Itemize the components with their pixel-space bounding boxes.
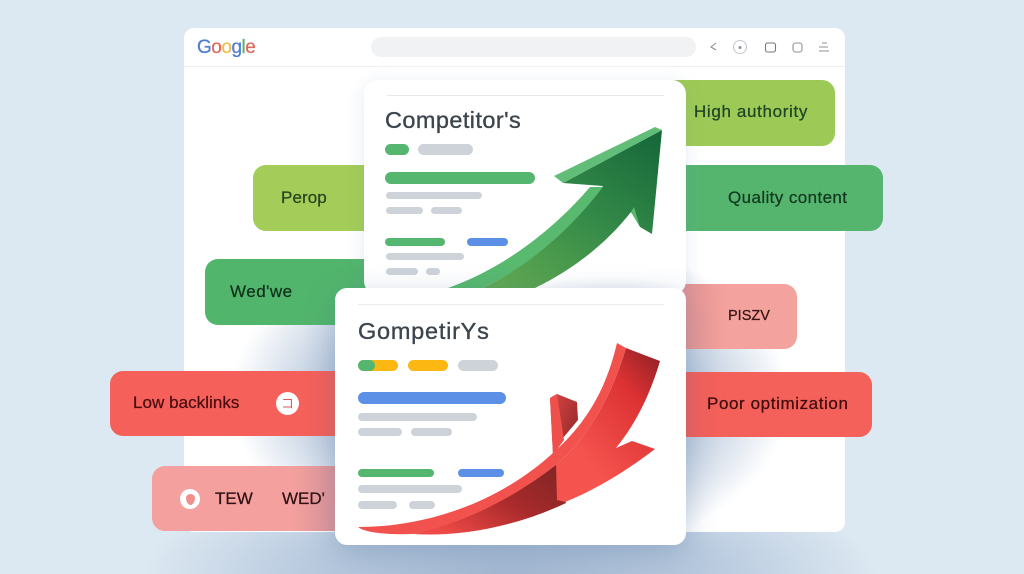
header divider [184, 66, 845, 67]
pill: high authority: High authority [694, 102, 808, 121]
card: top competitor [364, 80, 686, 295]
dark lower tail [413, 463, 566, 535]
pill: piszv: PISZV [728, 308, 770, 324]
gray short line [386, 207, 423, 214]
gray tag [418, 144, 473, 155]
green bar [358, 469, 434, 477]
browser content shading [224, 228, 845, 532]
google logo: Google [197, 37, 255, 58]
icon: low backlinks badge [276, 392, 299, 415]
tag row [385, 144, 473, 155]
pill: wed'we [205, 259, 385, 325]
pill: tew wed [152, 466, 352, 531]
search bar [371, 37, 696, 57]
pill: low backlinks [110, 371, 350, 436]
blue bar [467, 238, 508, 246]
yellow tag with green start [358, 360, 398, 371]
card top line [387, 95, 664, 96]
gray short line two [411, 428, 452, 436]
gray short line two [431, 207, 462, 214]
pill: piszv [670, 284, 797, 349]
heading: competitor's: Competitor's [385, 107, 521, 133]
shaft and head [556, 348, 660, 502]
first result lines [358, 392, 506, 436]
head highlight [554, 127, 662, 183]
pill: tew wed: WED' [282, 489, 325, 508]
gray line [386, 253, 464, 260]
gray short line [386, 268, 418, 275]
green title bar [385, 172, 535, 184]
gray short line [358, 428, 402, 436]
pill: quality content [655, 165, 883, 231]
pill: poor optimization: Poor optimization [707, 394, 849, 413]
blue bar [458, 469, 504, 477]
icon: badge drop [186, 494, 194, 504]
card top line [358, 304, 664, 305]
left fin [550, 394, 578, 455]
pill: tew wed: TEW [215, 489, 253, 508]
gray line [358, 485, 462, 493]
icon: low backlinks badge: コ [281, 396, 294, 411]
browser toolbar icons [710, 40, 829, 54]
green tag start [358, 360, 375, 371]
icon: tew badge [180, 489, 200, 509]
heading: gompetirys: GompetirYs [358, 318, 490, 344]
gray tag [458, 360, 498, 371]
pill: perop: Perop [281, 188, 327, 207]
second result lines [385, 238, 508, 275]
light edge [448, 187, 603, 288]
blue title bar [358, 392, 506, 404]
gray line [386, 192, 482, 199]
green bar [385, 238, 445, 246]
pill: quality content: Quality content [728, 188, 847, 207]
pill: perop [253, 165, 383, 231]
gray tiny line [409, 501, 435, 509]
yellow tag [408, 360, 448, 371]
gray short line [358, 501, 397, 509]
browser window [184, 28, 845, 532]
pill: poor optimization [670, 372, 872, 437]
shaft shadow [534, 266, 686, 314]
shaft and head [483, 130, 662, 288]
green tag [385, 144, 409, 155]
pill: low backlinks: Low backlinks [133, 393, 239, 412]
gray line [358, 413, 477, 421]
gray tiny line [426, 268, 440, 275]
card: bottom competitor [335, 288, 686, 545]
first result lines [385, 172, 535, 214]
notch fold [631, 207, 640, 227]
light edge [358, 343, 626, 534]
pill: wed'we: Wed'we [230, 282, 293, 301]
tag row [358, 360, 498, 371]
pill: high authority [655, 80, 835, 146]
fin highlight [550, 394, 564, 455]
second result lines [358, 469, 504, 509]
